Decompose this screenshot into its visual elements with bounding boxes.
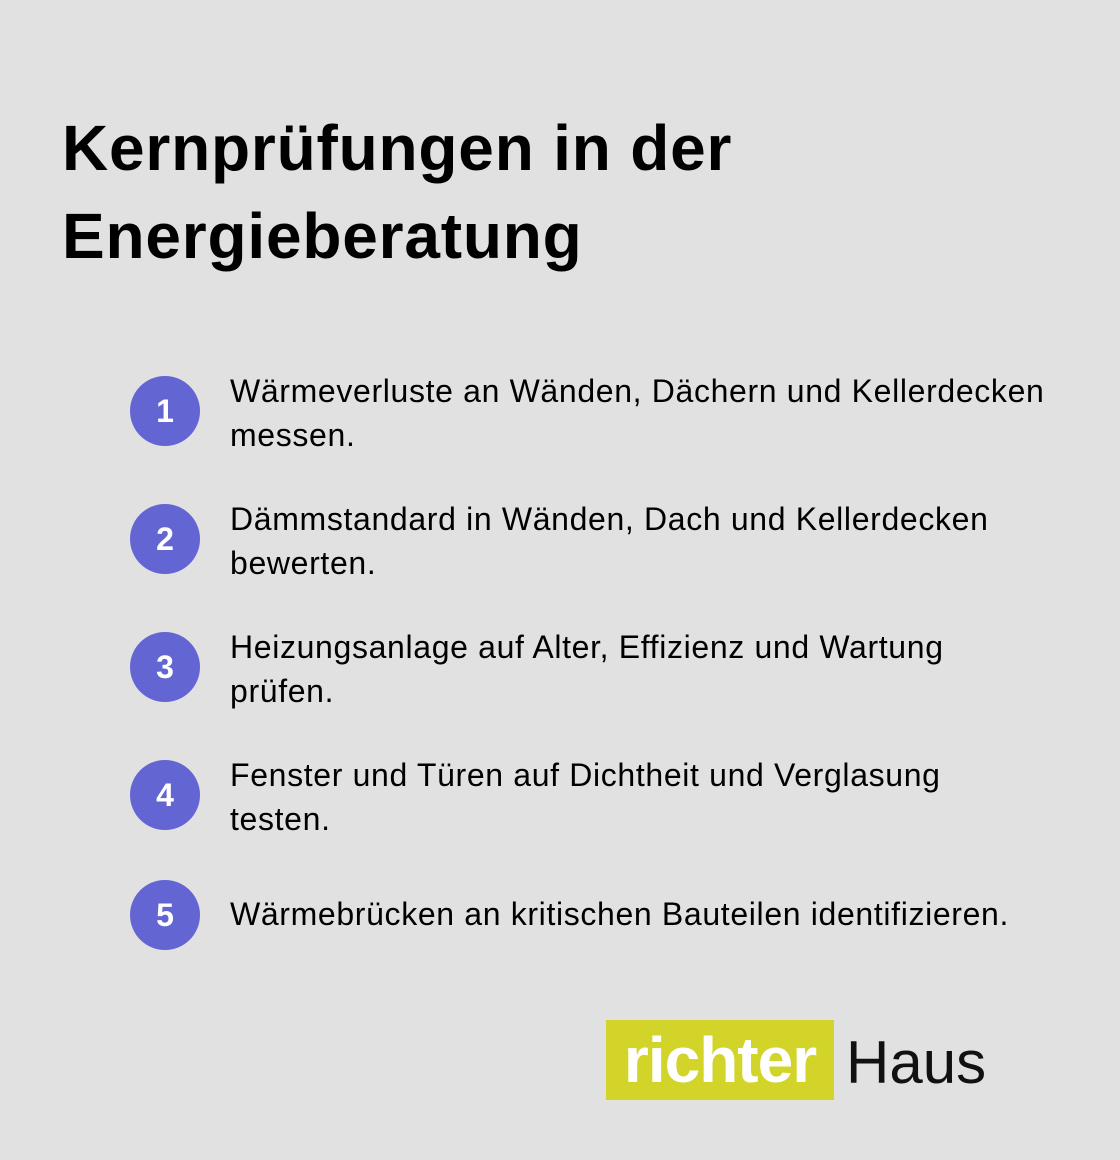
item 4: testen.	[230, 801, 331, 837]
item 4	[130, 757, 941, 837]
item 1	[130, 373, 1044, 453]
item 5: Wärmebrücken an kritischen Bauteilen identifizieren.	[230, 896, 1009, 932]
item 4: 4	[156, 777, 174, 813]
item 2: Dämmstandard in Wänden, Dach und Kellerdecken	[230, 501, 989, 537]
title	[62, 112, 732, 272]
logo	[606, 1020, 986, 1100]
item 3: Heizungsanlage auf Alter, Effizienz und Wartung	[230, 629, 944, 665]
logo: Haus	[846, 1029, 986, 1096]
item 1: Wärmeverluste an Wänden, Dächern und Kellerdecken	[230, 373, 1044, 409]
item 5	[130, 880, 1009, 950]
item 1: messen.	[230, 417, 356, 453]
logo: richter	[624, 1024, 816, 1096]
title: Energieberatung	[62, 200, 583, 272]
item 3	[130, 629, 944, 709]
title: Kernprüfungen in der	[62, 112, 732, 184]
item 2: bewerten.	[230, 545, 376, 581]
item 2	[130, 501, 989, 581]
item 5: 5	[156, 897, 174, 933]
item 3: 3	[156, 649, 174, 685]
item 3: prüfen.	[230, 673, 334, 709]
item 4: Fenster und Türen auf Dichtheit und Verglasung	[230, 757, 941, 793]
item 2: 2	[156, 521, 174, 557]
item 1: 1	[156, 393, 174, 429]
